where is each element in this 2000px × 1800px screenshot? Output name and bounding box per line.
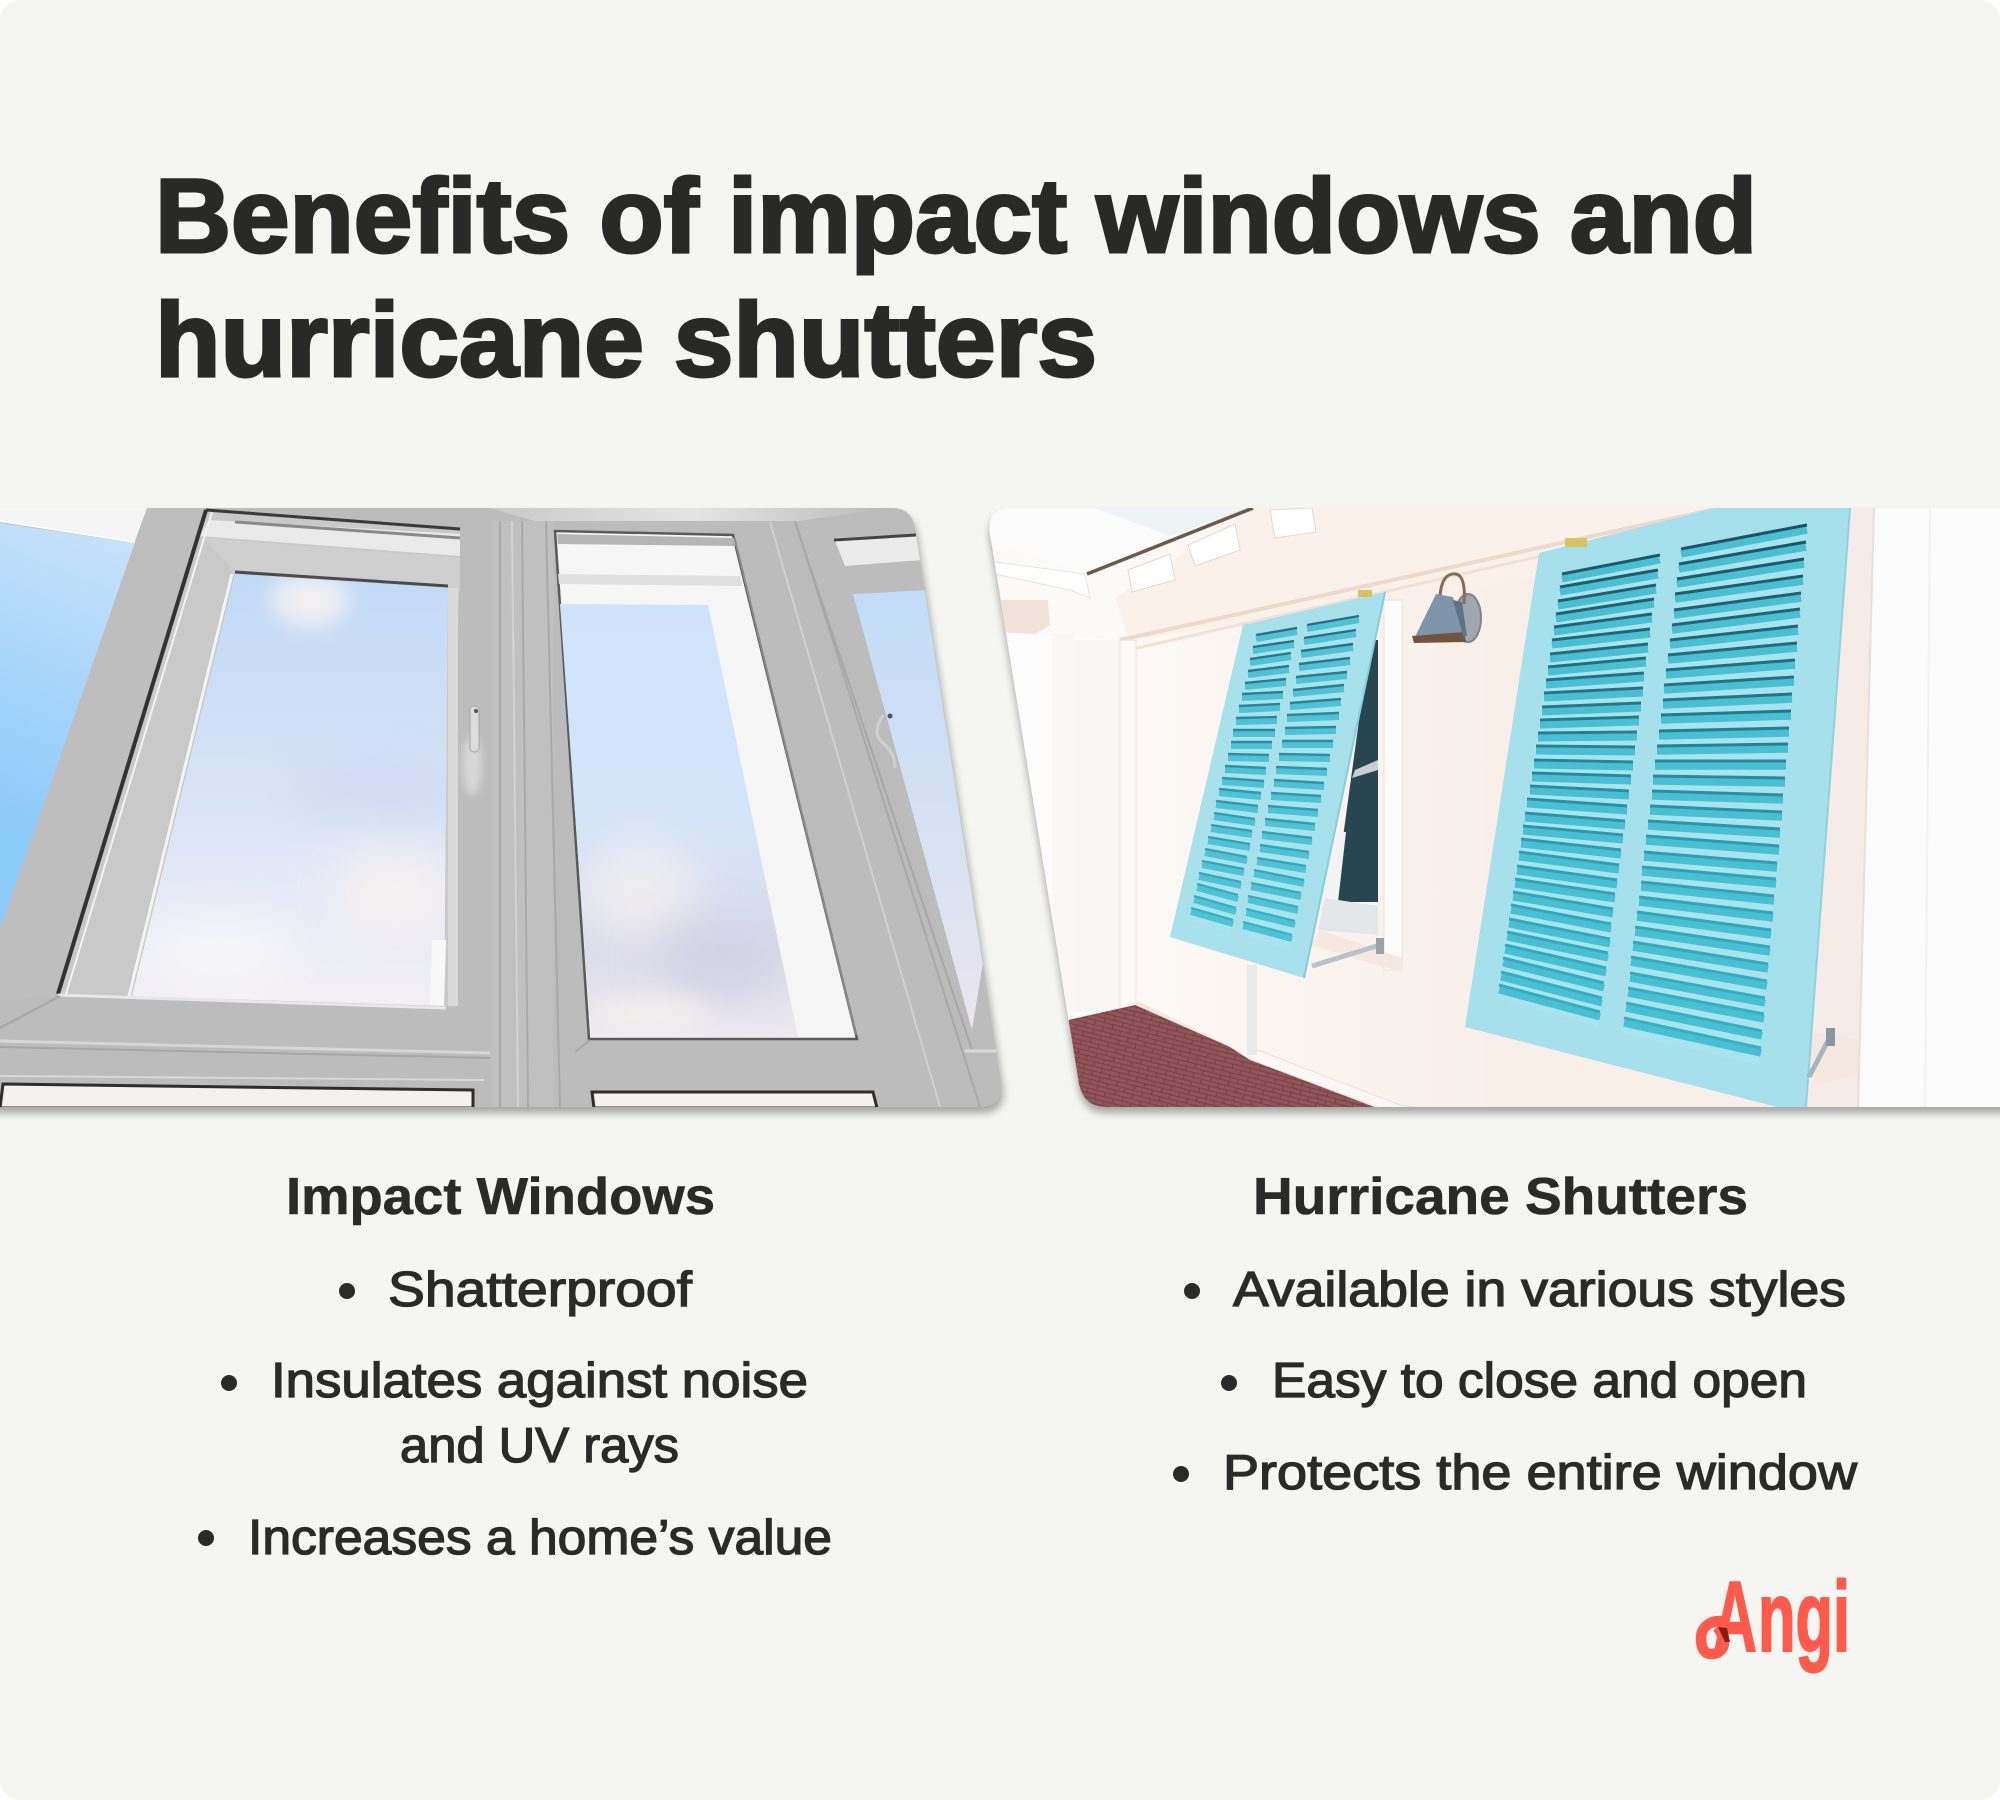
small window behind shutter xyxy=(1310,600,1402,972)
panel text: hurricane shutters xyxy=(1173,1168,1858,1500)
title: Benefits of impact windows and xyxy=(155,158,1757,275)
window 1 xyxy=(58,510,470,1008)
benefit: easy: Easy to close and open xyxy=(1272,1354,1807,1408)
logo: Angi xyxy=(1701,1561,1850,1673)
title: hurricane shutters xyxy=(155,282,1097,399)
shutter support arm xyxy=(1312,938,1384,966)
heading: impact windows: Impact Windows xyxy=(286,1168,715,1226)
window 2 xyxy=(555,531,857,1039)
small shutter xyxy=(1170,590,1385,978)
panel: hurricane shutters photo xyxy=(980,508,2000,1108)
benefit: insulates: Insulates against noise xyxy=(271,1354,808,1408)
brick floor xyxy=(1068,1005,1377,1108)
large shutter xyxy=(1465,508,1850,1107)
right trim and wall xyxy=(1857,508,2000,1107)
benefit: insulates: and UV rays xyxy=(400,1419,679,1473)
lower frame and bottom windows xyxy=(0,996,1000,1108)
window handle xyxy=(462,706,482,795)
benefit: protects: Protects the entire window xyxy=(1223,1446,1858,1500)
benefit: shatterproof: Shatterproof xyxy=(388,1263,692,1317)
heading: hurricane shutters: Hurricane Shutters xyxy=(1253,1168,1748,1226)
image shadows xyxy=(0,514,2000,1113)
panel text: impact windows xyxy=(198,1168,832,1565)
window 3 xyxy=(795,522,985,1050)
large shutter hinge arm xyxy=(1809,1028,1835,1077)
title xyxy=(155,158,1757,399)
panel: impact windows photo xyxy=(0,508,1020,1108)
porch corner and walls xyxy=(1000,632,1420,1108)
benefit: styles: Available in various styles xyxy=(1233,1263,1846,1317)
benefit: home value: Increases a home’s value xyxy=(248,1511,832,1565)
benefit: insulates xyxy=(221,1354,808,1473)
roof and eaves xyxy=(990,508,1714,650)
logo: Angi: A xyxy=(1713,1561,1757,1673)
logo: Angi: ngi xyxy=(1758,1561,1850,1673)
icon: wall lamp xyxy=(1412,574,1481,643)
